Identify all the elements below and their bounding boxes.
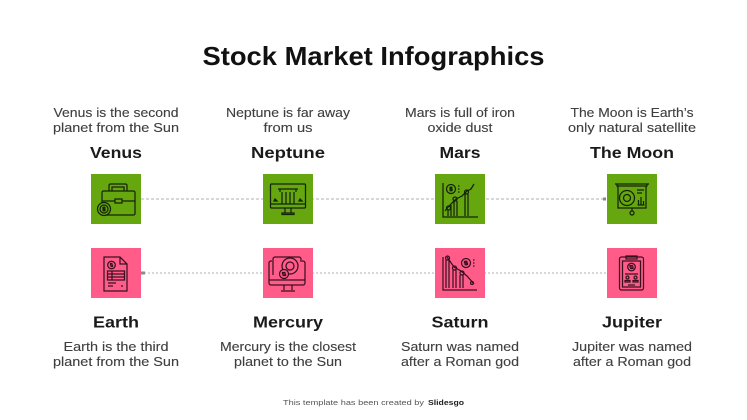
text: Jupiter description: after a Roman god	[573, 355, 691, 369]
panel: Jupiter	[572, 248, 692, 369]
icon: briefcase with coin	[91, 174, 141, 224]
heading: Jupiter: Jupiter	[602, 314, 662, 332]
text: Mars description: Mars is full of iron	[405, 106, 515, 120]
icon: rising stock chart	[435, 174, 485, 224]
text: Mars description	[405, 106, 515, 135]
text: The Moon description: The Moon is Earth’s	[570, 106, 694, 120]
text: Jupiter description	[572, 340, 692, 369]
panel: Mercury	[220, 248, 357, 369]
text: The Moon description	[568, 106, 696, 135]
text: Mercury description: planet to the Sun	[234, 355, 342, 369]
heading: Neptune: Neptune	[251, 145, 325, 162]
heading: Venus: Venus	[90, 145, 142, 162]
heading: Saturn: Saturn	[432, 314, 488, 332]
text: Neptune description	[226, 106, 351, 135]
icon: monitor with pie chart	[263, 248, 313, 298]
text: Jupiter description: Jupiter was named	[572, 340, 692, 354]
icon: falling stock chart	[435, 248, 485, 298]
panel: Neptune	[226, 106, 351, 224]
heading: Earth: Earth	[93, 314, 139, 332]
panel: Earth	[53, 248, 179, 369]
text: Mars description: oxide dust	[428, 121, 493, 135]
text: Saturn description: Saturn was named	[401, 340, 519, 354]
text: Mercury description: Mercury is the closest	[220, 340, 357, 354]
connector: top row arrow	[141, 198, 606, 200]
text: Mercury description	[220, 340, 357, 369]
text: Earth description	[53, 340, 179, 369]
icon: clipboard report	[607, 248, 657, 298]
text: Saturn description: after a Roman god	[401, 355, 519, 369]
panel: Mars	[405, 106, 515, 224]
heading: Mars: Mars	[440, 145, 481, 162]
icon: presentation board	[607, 174, 657, 224]
panel: Venus	[53, 106, 179, 224]
text: Neptune description: from us	[264, 121, 312, 135]
icon: monitor with ATM chart	[263, 174, 313, 224]
text: Venus description: planet from the Sun	[53, 121, 179, 135]
panel: Saturn	[401, 248, 519, 369]
heading: The Moon: The Moon	[590, 145, 674, 162]
title: Stock Market Infographics	[202, 41, 544, 71]
footer credit	[283, 398, 464, 407]
footer credit: This template has been created by	[283, 398, 424, 407]
text: Saturn description	[401, 340, 519, 369]
text: Earth description: Earth is the third	[64, 340, 169, 354]
heading: Mercury: Mercury	[253, 314, 323, 332]
panel: The Moon	[568, 106, 696, 224]
text: Earth description: planet from the Sun	[53, 355, 179, 369]
text: The Moon description: only natural satellite	[568, 121, 696, 135]
footer credit: Slidesgo	[428, 398, 464, 407]
text: Neptune description: Neptune is far away	[226, 106, 351, 120]
text: Venus description: Venus is the second	[54, 106, 179, 120]
icon: invoice document	[91, 248, 141, 298]
text: Venus description	[53, 106, 179, 135]
connector: bottom row arrow	[141, 272, 607, 274]
